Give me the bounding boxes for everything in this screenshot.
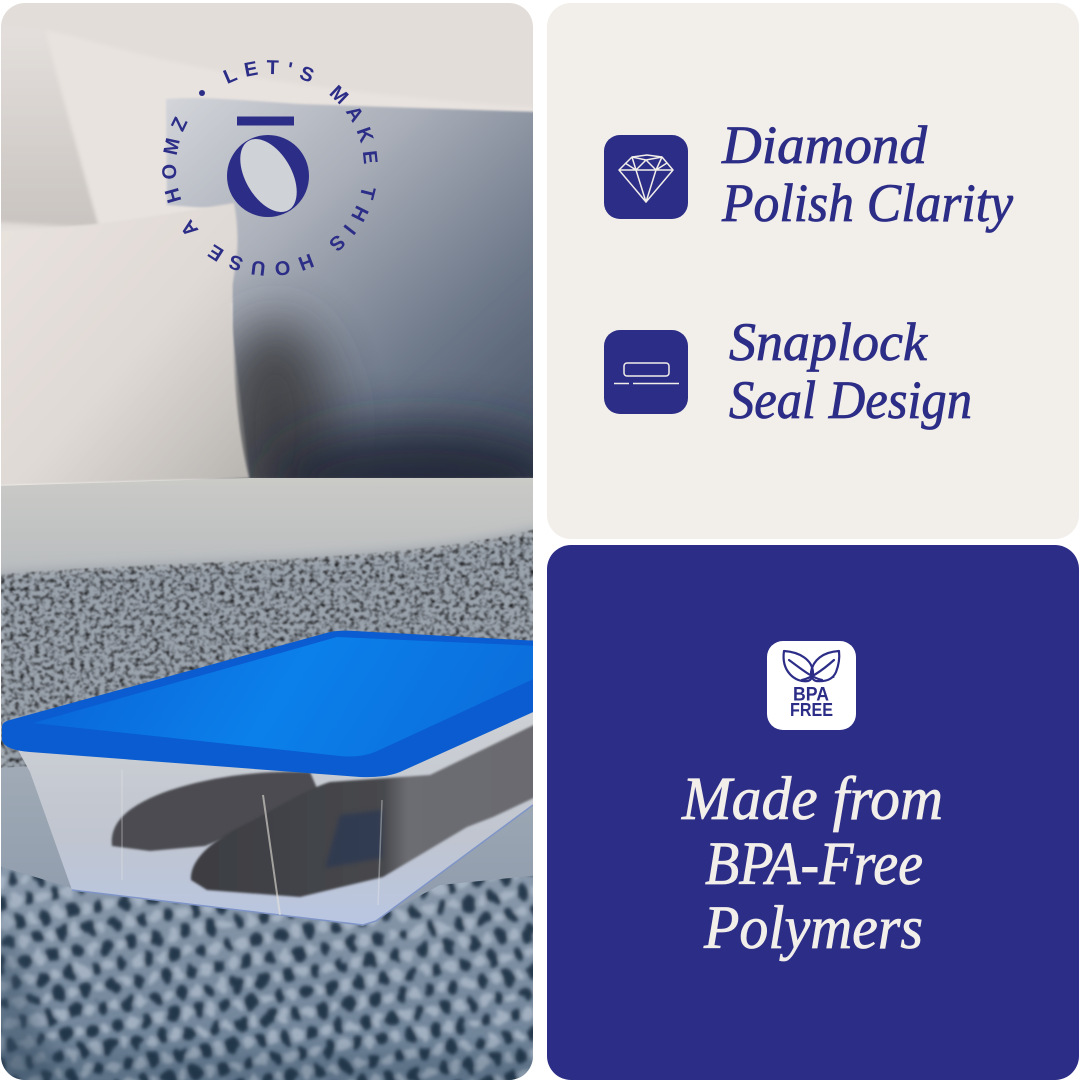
front cream pillow (0, 203, 249, 486)
logo dot (199, 90, 205, 96)
back left pillow (1, 104, 98, 226)
heading: Diamond Polish Clarity: Polish Clarity (721, 173, 1013, 233)
statement: Made from BPA-Free Polymers: Made from (681, 766, 943, 833)
blue lid (2, 631, 540, 777)
logo bar (237, 116, 294, 126)
right shoe (191, 722, 540, 897)
statement: Made from BPA-Free Polymers: Polymers (703, 895, 923, 962)
left shoe (112, 772, 322, 851)
logo badge (162, 60, 378, 276)
bed sheet band (0, 478, 540, 600)
lower knit blanket (1, 866, 533, 1080)
grey pillow (166, 98, 533, 480)
heading: Diamond Polish Clarity: Diamond (721, 115, 928, 175)
panel: product photo (0, 3, 570, 1080)
icon: snaplock (604, 330, 688, 414)
panel: BPA free (547, 545, 1079, 1080)
box body (18, 700, 540, 925)
box edge highlights (72, 805, 533, 925)
panel: features (547, 3, 1079, 539)
back centre pillow (78, 147, 102, 222)
heading: Snaplock Seal Design: Seal Design (729, 370, 972, 430)
logo O (227, 129, 309, 222)
icon: BPA free: FREE (790, 700, 833, 720)
upper fuzzy blanket (1, 526, 533, 768)
icon: BPA free (767, 641, 856, 730)
statement: Made from BPA-Free Polymers: BPA-Free (705, 831, 923, 898)
logo ring text: LET'S MAKE THIS HOUSE A HOMZ (162, 60, 378, 276)
heading: Snaplock Seal Design: Snaplock (729, 312, 928, 372)
smooth blanket mid area (1, 766, 533, 926)
icon: diamond (604, 135, 688, 219)
storage box (2, 631, 540, 925)
wall (1, 3, 533, 303)
icon: BPA free: BPA (793, 684, 829, 706)
